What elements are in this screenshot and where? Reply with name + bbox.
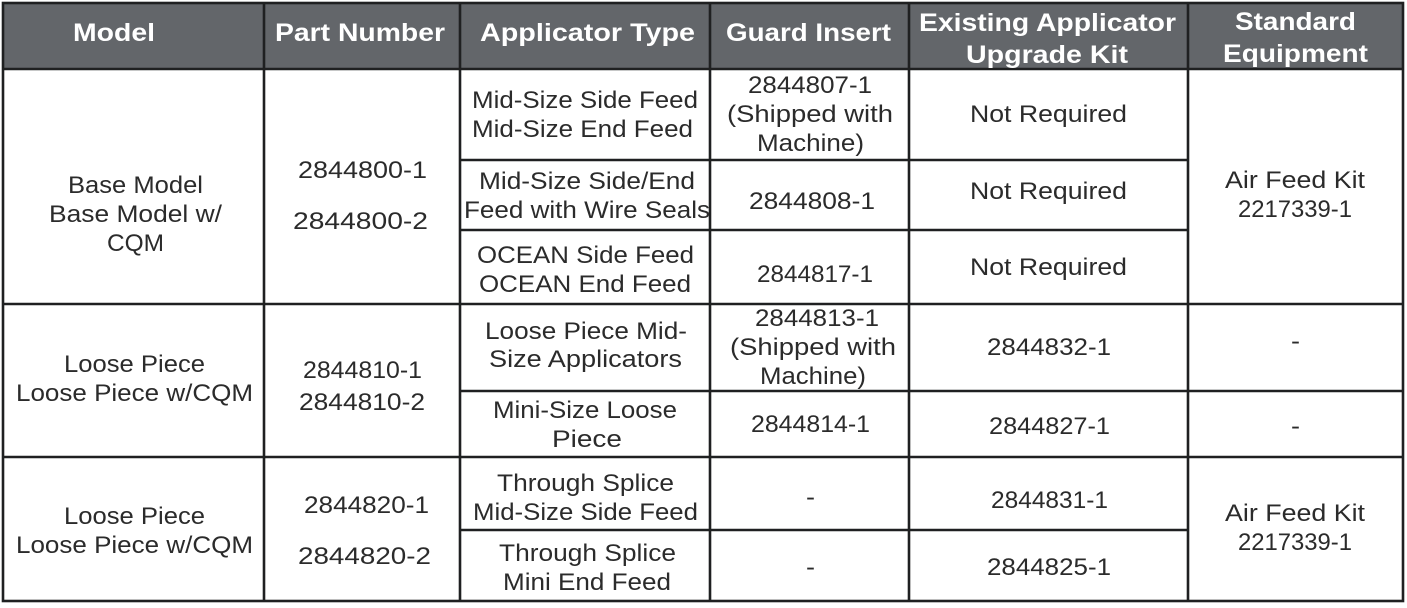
header: Standard Equipment: Equipment (1223, 40, 1369, 68)
header: Standard Equipment: Standard (1235, 8, 1356, 36)
guard insert: 2844814-1: 2844814-1 (751, 411, 870, 438)
model: loose piece: Loose Piece w/CQM (16, 380, 253, 407)
model: base model: Base Model w/ (49, 201, 222, 228)
model: loose piece (16, 351, 253, 407)
guard insert: 2844813-1 (730, 305, 896, 390)
guard insert: 2844813-1: Machine) (760, 363, 866, 390)
standard equipment: air feed kit (1225, 167, 1365, 223)
standard equipment: air feed kit: Air Feed Kit (1225, 167, 1365, 194)
guard insert: none 2: - (806, 554, 815, 581)
guard insert: 2844813-1: (Shipped with (730, 334, 896, 361)
header: Applicator Type: Applicator Type (480, 19, 695, 47)
part numbers: through splice (298, 492, 431, 570)
group: through splice rows (16, 470, 1365, 596)
part numbers: through splice: 2844820-2 (298, 543, 431, 570)
guard insert: 2844807-1 (727, 72, 893, 157)
applicator: mid-size with wire seals: Mid-Size Side/End (479, 168, 695, 195)
part numbers: base model: 2844800-1 (298, 157, 427, 184)
applicator: through splice mid-size: Through Splice (497, 470, 674, 497)
applicator: ocean: OCEAN Side Feed (477, 242, 694, 269)
applicator: ocean (477, 242, 694, 298)
upgrade kit: not required 3: Not Required (970, 254, 1127, 281)
applicator: mini-size loose piece: Piece (552, 426, 622, 453)
standard equipment: air feed kit: 2217339-1 (1238, 196, 1352, 223)
model: base model (49, 172, 222, 257)
applicator: through splice mini: Through Splice (499, 540, 676, 567)
standard equipment: air feed kit (1225, 500, 1365, 556)
model: loose piece: Loose Piece (64, 351, 205, 378)
model: base model: Base Model (68, 172, 203, 199)
applicator: mini-size loose piece: Mini-Size Loose (493, 397, 677, 424)
model: loose piece: Loose Piece (64, 503, 205, 530)
header: Existing Applicator Upgrade Kit: Upgrade Kit (966, 41, 1129, 69)
model: base model: CQM (107, 230, 164, 257)
standard equipment: none 2: - (1291, 413, 1300, 440)
guard insert: 2844807-1: 2844807-1 (748, 72, 872, 99)
upgrade kit: 2844832-1: 2844832-1 (987, 334, 1111, 361)
standard equipment: none 1: - (1291, 328, 1300, 355)
applicator: mid-size side and end feed: Mid-Size End Feed (472, 116, 693, 143)
guard insert: 2844807-1: (Shipped with (727, 101, 893, 128)
group: base model rows (49, 72, 1365, 298)
model: loose piece (16, 503, 253, 559)
upgrade kit: 2844827-1: 2844827-1 (989, 413, 1110, 440)
part numbers: base model (293, 157, 428, 235)
upgrade kit: 2844831-1: 2844831-1 (991, 487, 1108, 514)
header: Model: Model (73, 19, 155, 47)
applicator: mid-size side and end feed: Mid-Size Side Feed (472, 87, 698, 114)
guard insert: 2844808-1: 2844808-1 (749, 188, 875, 215)
upgrade kit: not required 2: Not Required (970, 178, 1127, 205)
part numbers: through splice: 2844820-1 (304, 492, 429, 519)
applicator: through splice mid-size: Mid-Size Side Feed (473, 499, 698, 526)
header: Existing Applicator Upgrade Kit (919, 9, 1176, 69)
applicator: through splice mid-size (473, 470, 698, 526)
applicator: loose piece mid-size (485, 318, 687, 373)
standard equipment: air feed kit: 2217339-1 (1238, 529, 1352, 556)
applicator: mid-size with wire seals: Feed with Wire Seals (464, 197, 710, 224)
applicator: loose piece mid-size: Loose Piece Mid- (485, 318, 687, 345)
guard insert: 2844813-1: 2844813-1 (755, 305, 879, 332)
upgrade kit: 2844825-1: 2844825-1 (987, 554, 1111, 581)
model: loose piece: Loose Piece w/CQM (16, 532, 253, 559)
header: Part Number: Part Number (275, 19, 445, 47)
applicator: mini-size loose piece (493, 397, 677, 453)
header: Guard Insert: Guard Insert (726, 19, 892, 47)
upgrade kit: not required 1: Not Required (970, 101, 1127, 128)
applicator: through splice mini (499, 540, 676, 596)
part numbers: loose piece: 2844810-1 (303, 357, 422, 384)
applicator: mid-size side and end feed (472, 87, 698, 143)
applicator: ocean: OCEAN End Feed (479, 271, 691, 298)
guard insert: 2844807-1: Machine) (757, 130, 864, 157)
applicator: mid-size with wire seals (464, 168, 710, 224)
applicator: through splice mini: Mini End Feed (503, 569, 671, 596)
header: Existing Applicator Upgrade Kit: Existing Applicator (919, 9, 1176, 37)
guard insert: none 1: - (806, 484, 815, 511)
part numbers: loose piece: 2844810-2 (299, 389, 425, 416)
header: Standard Equipment (1223, 8, 1369, 68)
guard insert: 2844817-1: 2844817-1 (757, 261, 873, 288)
standard equipment: air feed kit: Air Feed Kit (1225, 500, 1365, 527)
table header band (3, 3, 1403, 69)
group: loose piece rows (16, 305, 1300, 453)
part numbers: loose piece (299, 357, 425, 416)
part numbers: base model: 2844800-2 (293, 208, 428, 235)
header row (73, 8, 1369, 69)
applicator: loose piece mid-size: Size Applicators (489, 346, 682, 373)
